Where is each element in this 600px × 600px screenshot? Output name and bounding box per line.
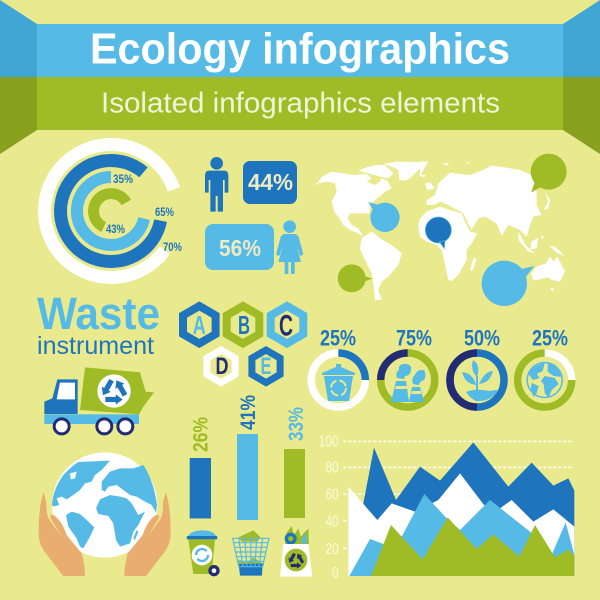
axis labels: 80 <box>325 460 339 477</box>
icon: man <box>205 157 228 212</box>
instrument caption: instrument <box>37 332 154 360</box>
icon: recycling bag <box>280 526 312 577</box>
radial chart labels: 35% <box>113 174 133 186</box>
donut: waste 25%: 25% <box>320 326 356 350</box>
area chart <box>319 434 574 582</box>
icon: waste truck <box>44 367 154 434</box>
donut: waste 25% <box>311 326 365 407</box>
bubble: north america <box>368 202 400 232</box>
axis labels: 20 <box>325 541 339 558</box>
hexagon letters: E <box>260 353 272 380</box>
icon: wire basket <box>233 530 269 576</box>
icon: woman <box>276 220 303 274</box>
icon: globe in hands <box>39 452 171 576</box>
bubble: africa <box>425 217 451 249</box>
subtitle: Isolated infographics elements <box>101 88 500 120</box>
axis labels: 0 <box>332 565 339 582</box>
map: old world <box>418 162 565 292</box>
radial chart labels: 70% <box>163 242 182 254</box>
hexagon letters: D <box>216 353 228 380</box>
icon: trash can <box>322 364 355 401</box>
donut: factory 75%: 75% <box>396 326 432 350</box>
female statistic: 56% <box>219 235 261 261</box>
map bubbles <box>338 154 567 306</box>
map: americas <box>312 162 428 300</box>
hexagon letters: A <box>193 310 206 340</box>
bin icons <box>187 526 312 577</box>
waste heading: Waste <box>37 288 160 339</box>
female statistic <box>205 220 303 274</box>
world map with bubbles <box>312 154 567 306</box>
bar label 26%: 26% <box>190 417 212 452</box>
donut: plant 50%: 50% <box>464 326 500 350</box>
bar label 33%: 33% <box>285 407 308 441</box>
radial chart labels: 65% <box>155 207 174 219</box>
donut: earth 25%: 25% <box>532 326 568 350</box>
radial progress chart <box>45 145 182 278</box>
icon: cooling towers <box>391 364 426 402</box>
icon: wheeled bin <box>187 530 218 575</box>
icon: small earth <box>527 362 562 398</box>
icon: plant in hand <box>462 360 498 401</box>
waste heading <box>37 288 160 360</box>
radial chart labels: 43% <box>106 224 125 236</box>
globe land <box>52 461 157 548</box>
male statistic: 44% <box>248 169 293 195</box>
hexagon letters <box>183 306 303 383</box>
title: Ecology infographics <box>90 24 510 74</box>
bubble: northeast asia <box>531 154 567 193</box>
axis labels: 100 <box>319 434 339 451</box>
header banner <box>0 0 600 154</box>
bar chart <box>190 395 308 520</box>
hexagon letters: C <box>279 310 293 342</box>
bubble: south america <box>338 264 373 292</box>
axis labels <box>319 434 339 582</box>
hexagon letters: B <box>238 310 250 340</box>
bubble: australia <box>482 261 534 306</box>
male statistic <box>205 157 297 212</box>
hands <box>39 493 171 576</box>
donut: factory 75% <box>381 326 435 407</box>
donut: earth 25% <box>518 326 572 407</box>
bar label 41%: 41% <box>237 395 260 430</box>
donut: plant 50% <box>450 326 504 407</box>
axis labels: 60 <box>325 487 339 504</box>
radial chart labels <box>106 174 182 254</box>
axis labels: 40 <box>325 514 339 531</box>
